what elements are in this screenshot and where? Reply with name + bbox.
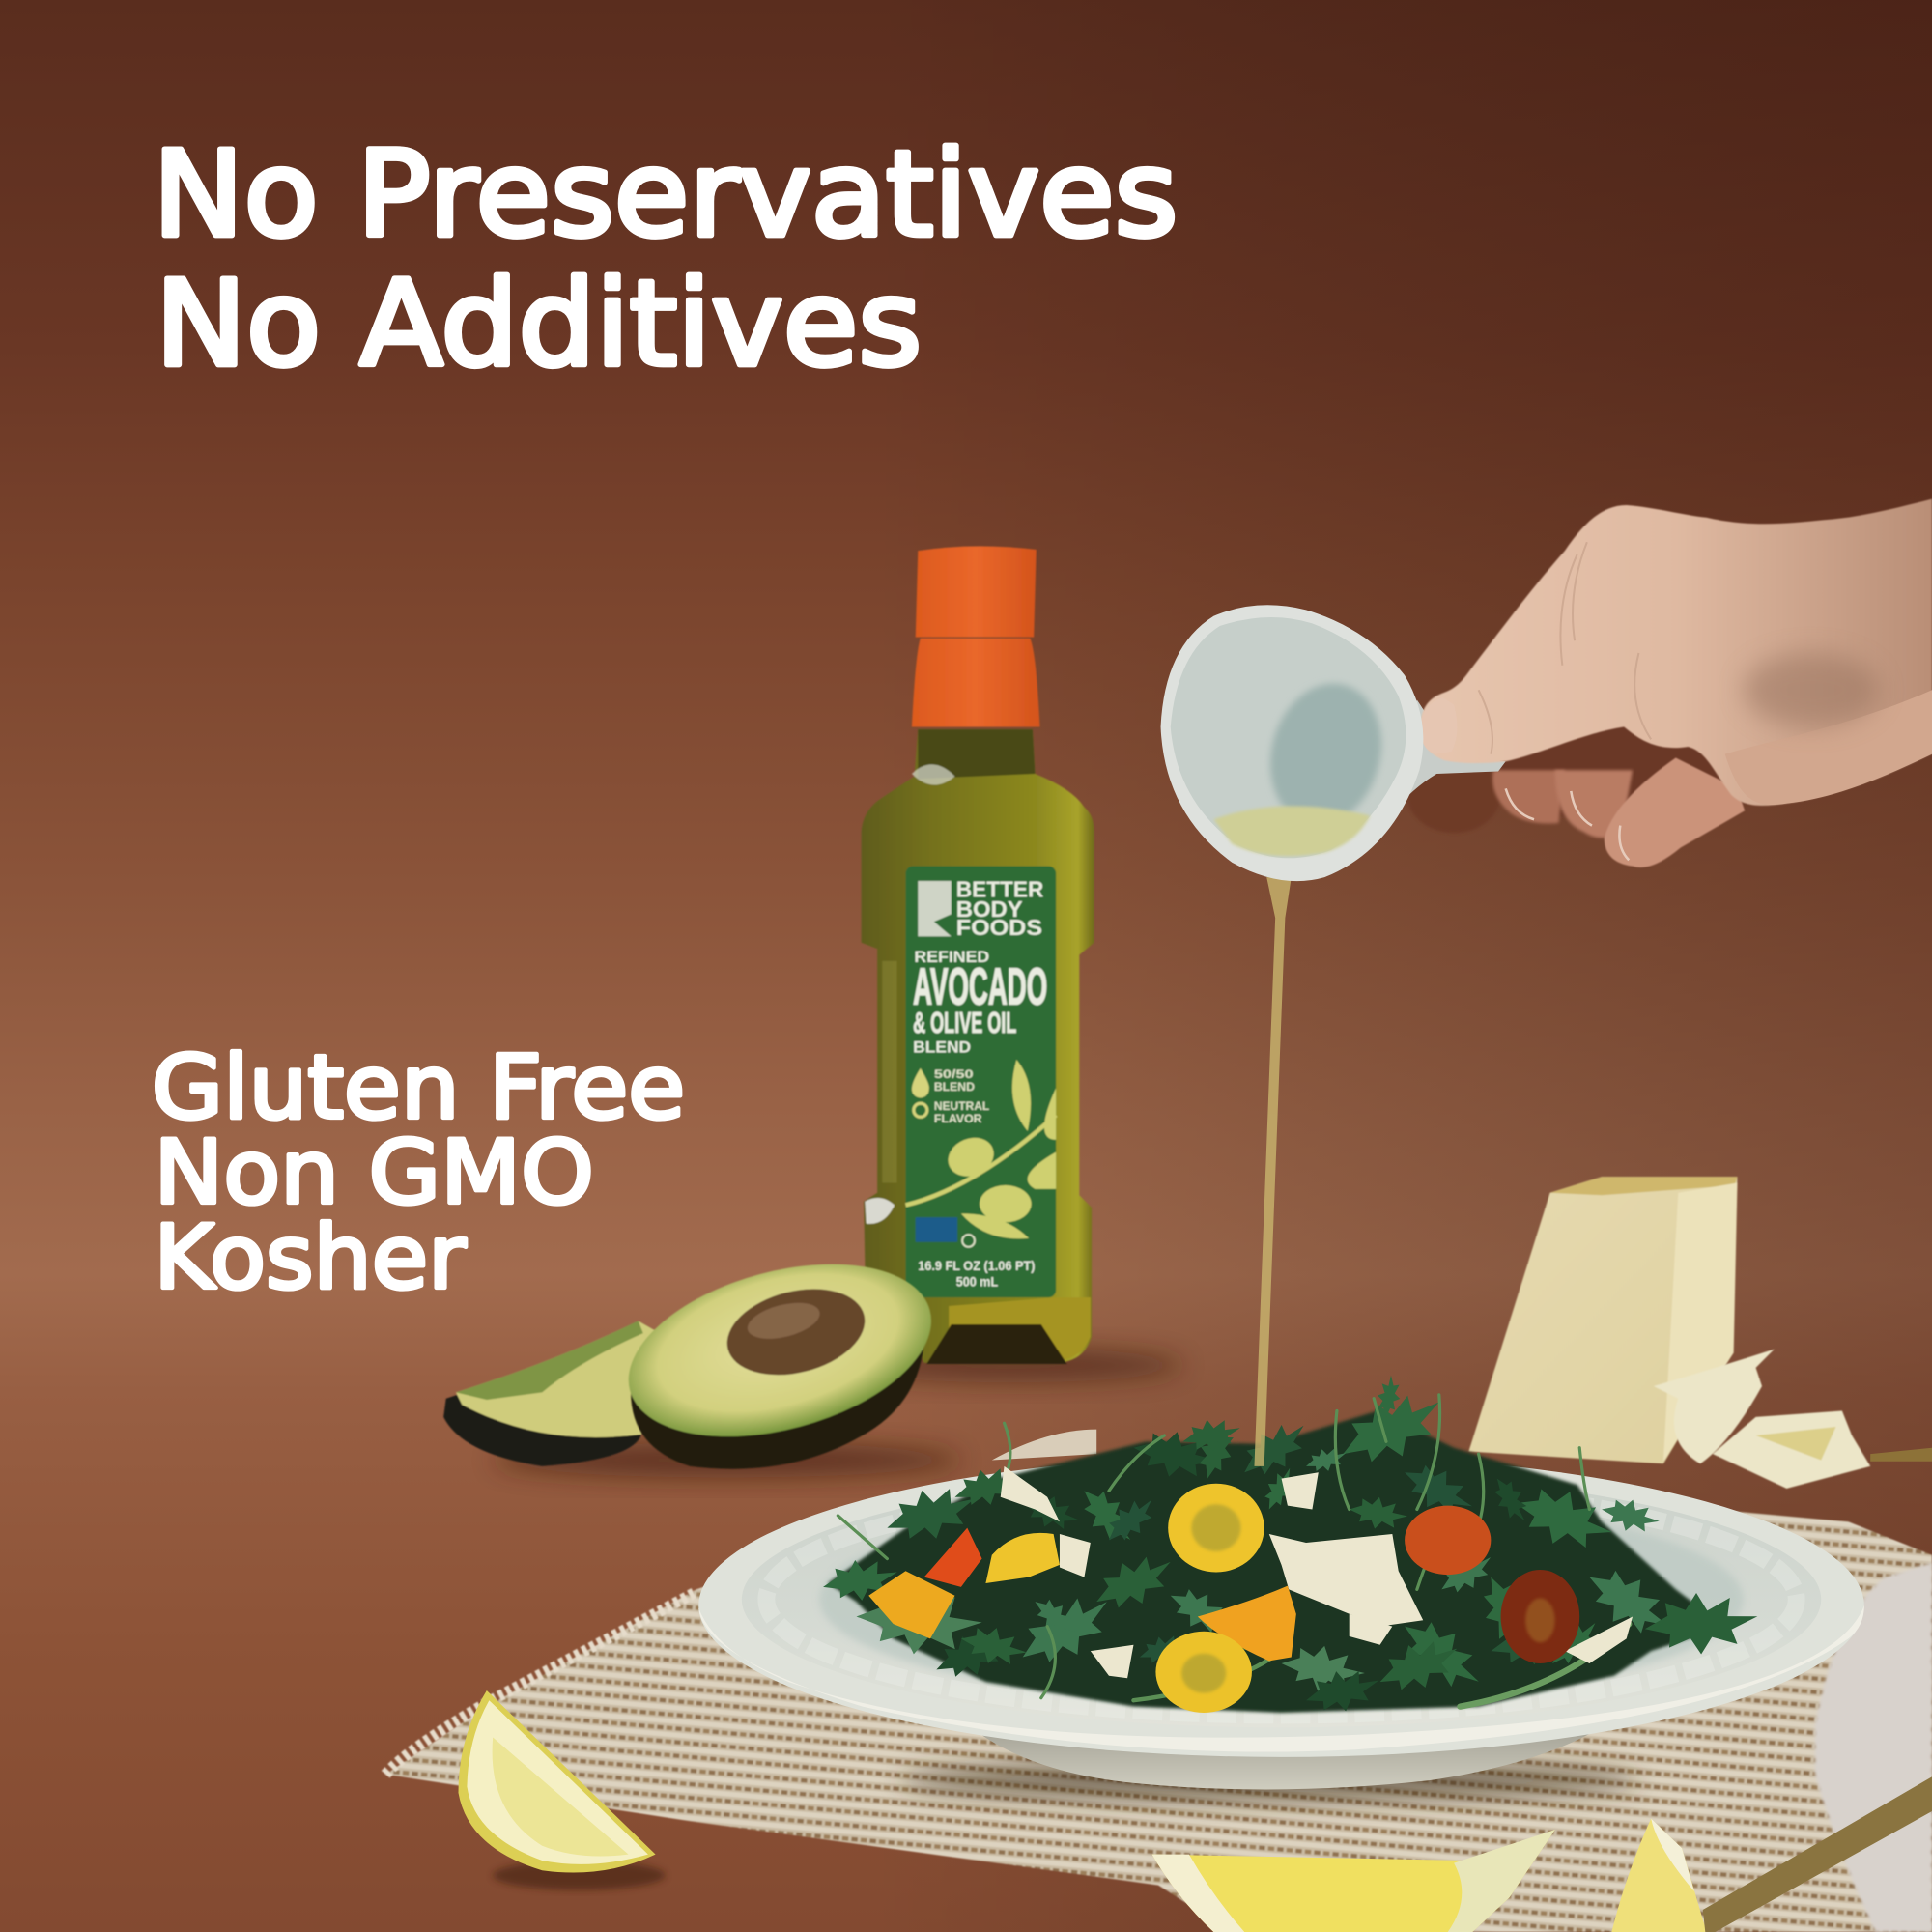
avocado wedge — [443, 1321, 656, 1466]
cheese flakes — [1001, 1466, 1633, 1678]
green label — [906, 867, 1056, 1297]
shadowed palm gap — [1491, 721, 1756, 823]
plate shadow — [899, 1761, 1638, 1801]
shadow: bottle and avocado — [838, 1348, 1182, 1382]
brand logo — [918, 881, 952, 936]
finger nails — [1506, 788, 1629, 860]
lemon wedge bottom right — [1611, 1819, 1707, 1932]
thumb nail — [1421, 697, 1457, 754]
claims text: Kosher — [154, 1208, 467, 1309]
arugula leaves — [820, 1374, 1759, 1719]
claims text: Non GMO — [154, 1122, 594, 1224]
back of hand with thumb — [1421, 499, 1932, 806]
bottle body — [862, 729, 1094, 1363]
olive branch — [906, 1060, 1056, 1238]
napkin — [1815, 1562, 1932, 1932]
cup handle — [1392, 699, 1506, 813]
claims: BLEND — [934, 1080, 975, 1094]
palm side shading — [1725, 690, 1932, 805]
hand pouring from cup — [1161, 499, 1932, 881]
net contents — [918, 1259, 1035, 1290]
cup interior well — [1255, 671, 1397, 838]
shadow: avocados — [493, 1443, 961, 1477]
tomatoes — [868, 1484, 1579, 1713]
product bottle — [862, 546, 1094, 1364]
net contents: 500 mL — [956, 1275, 998, 1290]
headline — [153, 126, 1178, 393]
certification badges — [916, 1217, 957, 1242]
index finger behind cup — [1407, 756, 1501, 833]
ceramic cup — [1161, 605, 1423, 881]
bottle highlights — [912, 764, 955, 785]
claims: FLAVOR — [934, 1112, 982, 1125]
net contents: 16.9 FL OZ (1.06 PT) — [918, 1259, 1035, 1273]
utensil behind cheese — [1870, 1448, 1932, 1462]
brand name — [956, 877, 1044, 940]
orange cap top — [916, 546, 1037, 637]
plate well — [742, 1471, 1821, 1727]
plate rim — [698, 1454, 1864, 1757]
placemat — [385, 1430, 1932, 1932]
oil stream — [1254, 877, 1292, 1466]
brand name: BODY — [956, 896, 1023, 922]
product name: & OLIVE OIL — [913, 1007, 1016, 1039]
headline: No Additives — [156, 255, 922, 393]
product name: REFINED — [914, 948, 989, 966]
little finger — [1605, 757, 1745, 867]
orange cap band — [912, 639, 1040, 727]
lemon wedge bottom centre — [1152, 1830, 1555, 1932]
arugula salad — [820, 1374, 1759, 1719]
plate base — [961, 1719, 1614, 1789]
gold utensil — [1703, 1776, 1932, 1932]
salad mass — [828, 1410, 1725, 1713]
knuckle creases — [1479, 542, 1651, 754]
brand name: FOODS — [956, 915, 1042, 940]
product name: AVOCADO — [913, 959, 1047, 1016]
cheese shavings — [1654, 1350, 1870, 1489]
claims text — [152, 1037, 685, 1309]
middle finger — [1492, 770, 1565, 823]
product name — [913, 948, 1047, 1056]
product name: BLEND — [913, 1037, 971, 1056]
claims: 50/50 — [934, 1067, 974, 1081]
rocket stems — [838, 1395, 1629, 1707]
lemon wedge left — [458, 1690, 666, 1890]
oil in cup — [1213, 806, 1370, 856]
claims text: Gluten Free — [152, 1037, 685, 1139]
avocado half — [610, 1235, 951, 1469]
hand shadow at wrist — [1744, 653, 1879, 727]
claims — [912, 1067, 990, 1125]
ring finger — [1555, 770, 1633, 838]
headline: No Preservatives — [153, 126, 1178, 264]
brand name: BETTER — [956, 877, 1044, 902]
parmesan wedge — [1468, 1177, 1737, 1463]
avocado pit — [718, 1275, 874, 1388]
white ceramic plate — [698, 1454, 1864, 1789]
claims: NEUTRAL — [934, 1099, 990, 1113]
